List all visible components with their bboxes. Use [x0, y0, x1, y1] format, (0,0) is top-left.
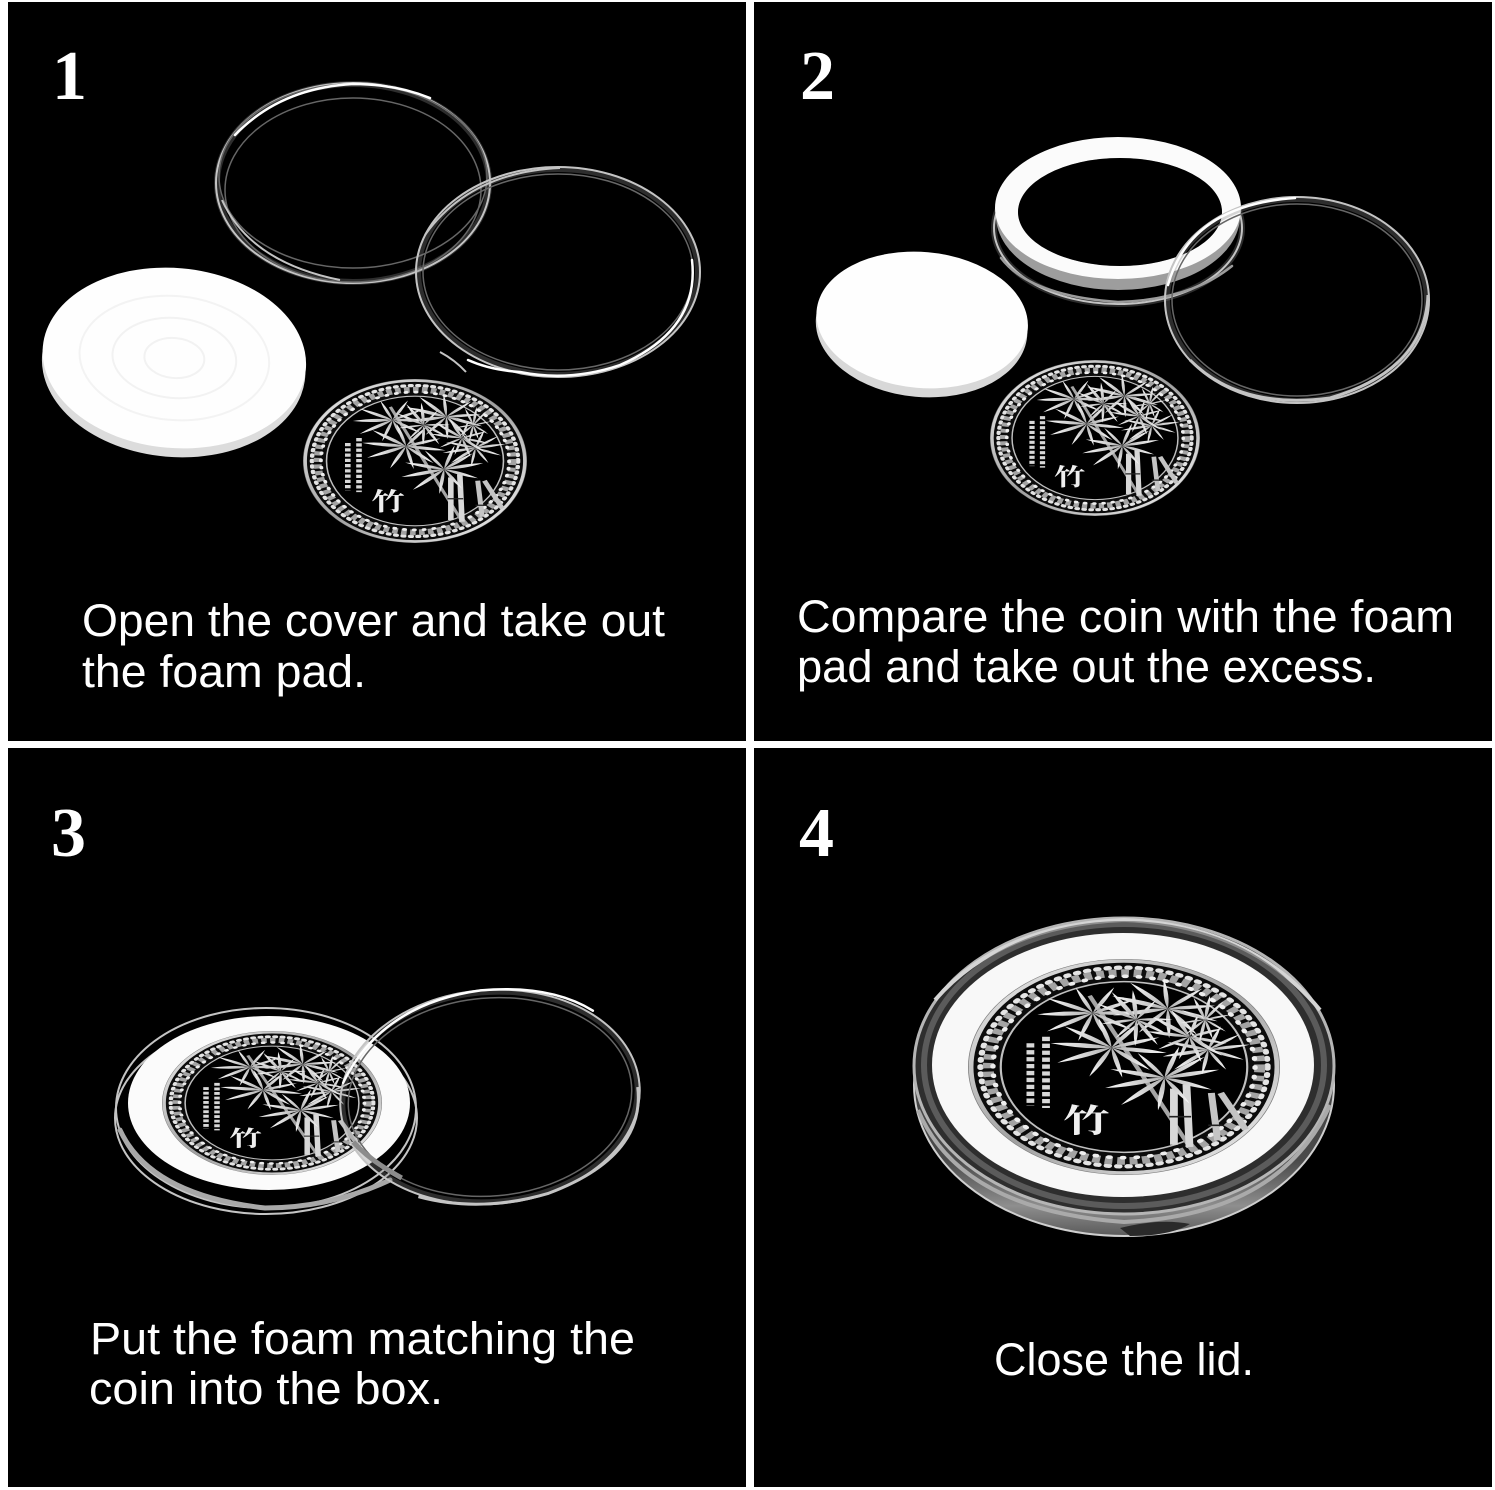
instruction text: Put the foam matching the — [90, 1313, 635, 1364]
panel: step 4 — [754, 748, 1492, 1487]
instruction text: Compare the coin with the foam — [797, 591, 1454, 642]
silver bamboo coin — [303, 379, 527, 543]
instruction text — [797, 591, 1454, 692]
foam pad — [810, 243, 1034, 406]
silver bamboo coin: 竹 — [371, 488, 405, 516]
silver bamboo coin — [968, 959, 1280, 1175]
step number 4: 4 — [799, 795, 834, 872]
instruction text: Close the lid. — [994, 1334, 1254, 1385]
closed capsule — [914, 918, 1334, 1236]
foam pad — [34, 257, 314, 468]
panel: step 2 — [754, 2, 1492, 741]
step number 3: 3 — [51, 795, 86, 872]
instruction text: Open the cover and take out — [82, 595, 666, 646]
capsule base with foam ring — [994, 137, 1242, 304]
capsule lid: clear disc — [1165, 197, 1429, 403]
step number 1: 1 — [52, 38, 87, 115]
capsule lid: clear disc — [331, 977, 649, 1217]
capsule base with foam — [115, 1008, 417, 1214]
silver bamboo coin: 竹 — [1054, 465, 1086, 491]
step number 2: 2 — [800, 38, 835, 115]
silver bamboo coin — [162, 1031, 382, 1175]
silver bamboo coin: 竹 — [229, 1127, 262, 1152]
panel: step 3 — [8, 748, 746, 1487]
instruction text: the foam pad. — [82, 646, 366, 697]
foam insert — [932, 933, 1314, 1197]
silver bamboo coin — [990, 360, 1200, 516]
instruction text: pad and take out the excess. — [797, 641, 1376, 692]
silver bamboo coin: 竹 — [1063, 1103, 1110, 1139]
capsule lid: clear disc — [416, 167, 700, 377]
instruction text: coin into the box. — [89, 1363, 443, 1414]
panel: step 1 — [8, 2, 746, 741]
capsule ring: back half — [216, 83, 490, 283]
instruction text — [82, 595, 666, 697]
instruction text — [89, 1313, 635, 1414]
